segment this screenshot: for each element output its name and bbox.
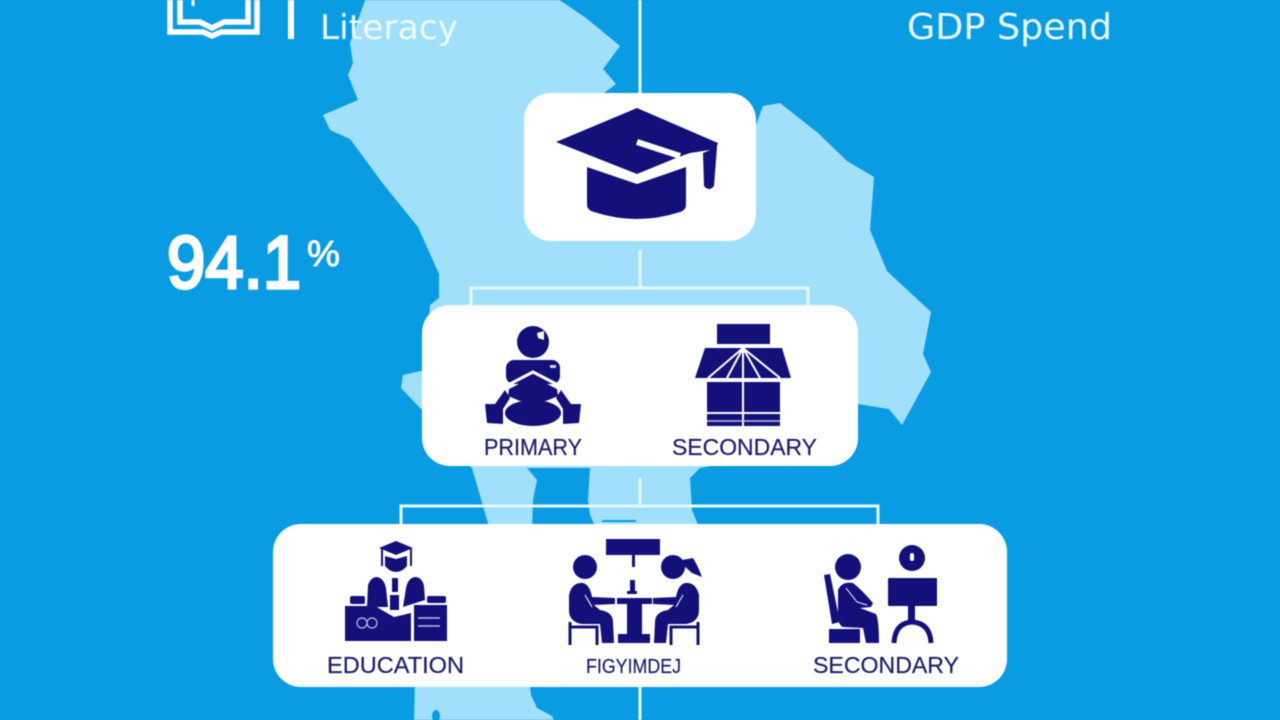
label: secondary: SECONDARY xyxy=(672,434,817,460)
icon: primary student xyxy=(485,326,581,426)
icon: two people at table xyxy=(569,539,702,645)
divider beside book icon xyxy=(288,0,294,39)
heading: GDP spend: GDP Spend xyxy=(907,7,1112,48)
icon: graduation cap xyxy=(556,108,718,219)
statistic: literacy percent: % xyxy=(307,233,340,274)
label: garbled middle caption: FIGYIMDEJ xyxy=(586,656,681,678)
map silhouette xyxy=(323,0,931,720)
statistic: literacy percent: 94.1 xyxy=(167,221,301,304)
label: secondary right: SECONDARY xyxy=(813,652,959,678)
label: education: EDUCATION xyxy=(327,652,464,678)
connector lines xyxy=(401,0,878,720)
heading: literacy: Literacy xyxy=(320,8,458,48)
panel: primary and secondary xyxy=(422,305,858,466)
panel: graduation cap xyxy=(524,93,756,241)
label: primary: PRIMARY xyxy=(484,434,582,460)
icon: open book xyxy=(170,0,257,36)
panel: education pathways xyxy=(273,524,1007,687)
icon: secondary school building xyxy=(695,324,791,426)
icon: graduate at desk xyxy=(345,541,447,641)
icon: person at screen xyxy=(824,545,937,643)
